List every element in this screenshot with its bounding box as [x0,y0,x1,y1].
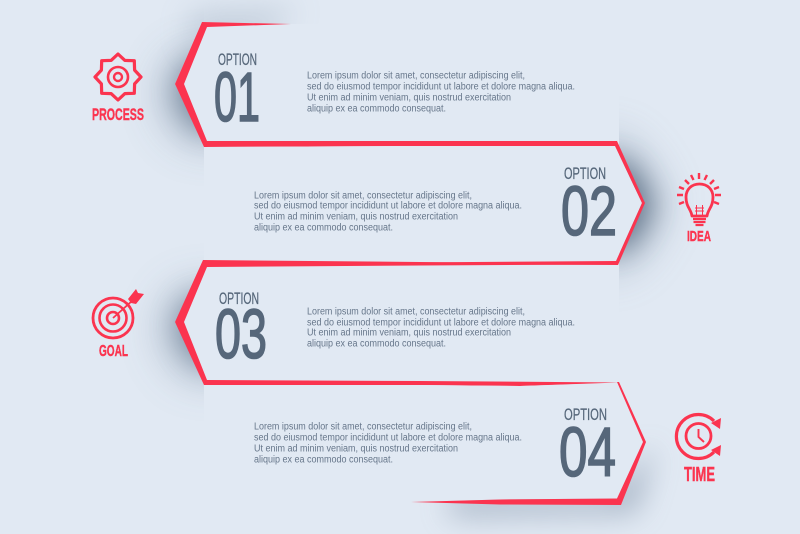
icon: gear [95,54,141,100]
label: process: PROCESS [92,105,144,124]
text block 1 [307,70,575,114]
heading: option 03 [215,289,267,373]
heading: option 03: OPTION [219,289,259,308]
label: goal: GOAL [99,343,128,360]
panel 3: option 03 [175,260,619,386]
text block 3: Lorem ipsum dolor sit amet, consectetur adipiscing elit, [307,306,525,318]
heading: option 04 [559,405,616,491]
text block 3 [307,306,575,350]
heading: option 04: 04 [559,413,616,491]
icon: clock with circular arrows [676,415,721,458]
panel shadows [165,8,660,515]
text block 4 [254,422,522,466]
icon: light bulb [677,173,721,225]
text block 2: Ut enim ad minim veniam, quis nostrud exercitation [254,212,458,222]
text block 1: sed do eiusmod tempor incididunt ut labore et dolore magna aliqua. [307,82,575,92]
text block 1: aliquip ex ea commodo consequat. [307,104,446,114]
text block 2: aliquip ex ea commodo consequat. [254,222,393,234]
panel 2: option 02 [204,141,645,265]
text block 4: Lorem ipsum dolor sit amet, consectetur adipiscing elit, [254,422,472,432]
text block 2: Lorem ipsum dolor sit amet, consectetur adipiscing elit, [254,190,472,202]
panel 4 red border [411,382,646,505]
heading: option 01 [214,50,260,136]
text block 4: aliquip ex ea commodo consequat. [254,454,393,466]
label: idea: IDEA [687,228,711,245]
heading: option 03: 03 [215,295,267,373]
heading: option 02 [561,164,617,250]
heading: option 01: 01 [214,58,260,136]
label: time: TIME [684,464,715,486]
panel 1 red border [175,22,617,147]
infographic [92,0,721,531]
text block 4: sed do eiusmod tempor incididunt ut labore et dolore magna aliqua. [254,432,522,444]
panel 2 red border [400,141,645,265]
heading: option 02: 02 [561,172,617,250]
text block 2: sed do eiusmod tempor incididunt ut labore et dolore magna aliqua. [254,200,522,212]
panel 3 red border [175,260,619,386]
panel 1: option 01 [175,22,619,147]
text block 4: Ut enim ad minim veniam, quis nostrud exercitation [254,444,458,454]
heading: option 04: OPTION [564,405,607,424]
text block 1: Lorem ipsum dolor sit amet, consectetur adipiscing elit, [307,70,525,82]
text block 1: Ut enim ad minim veniam, quis nostrud exercitation [307,92,511,104]
text block 3: aliquip ex ea commodo consequat. [307,338,446,350]
icon: target with arrow [93,289,144,338]
text block 2 [254,190,522,234]
heading: option 02: OPTION [564,164,606,183]
text block 3: sed do eiusmod tempor incididunt ut labore et dolore magna aliqua. [307,318,575,328]
panel 4: option 04 [204,382,646,505]
heading: option 01: OPTION [218,50,257,69]
text block 3: Ut enim ad minim veniam, quis nostrud exercitation [307,328,511,338]
